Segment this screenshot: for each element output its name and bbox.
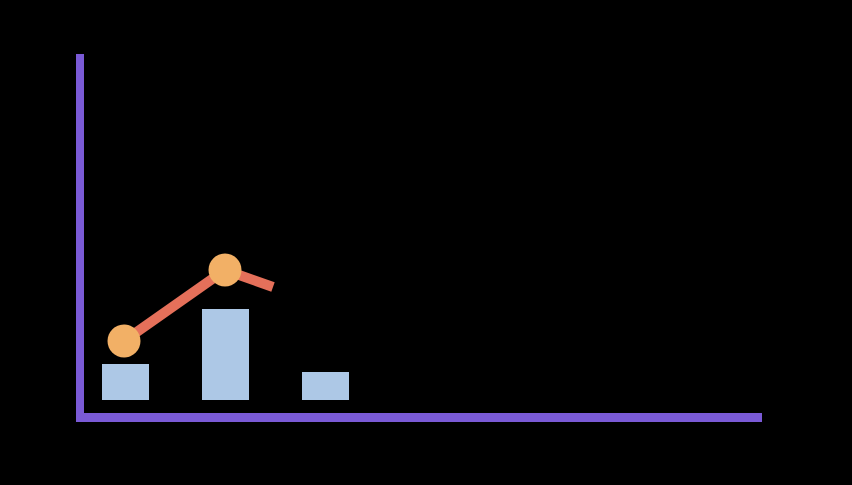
trend line	[124, 270, 273, 341]
axes	[76, 54, 762, 422]
data points	[108, 254, 242, 358]
bars	[102, 309, 349, 400]
